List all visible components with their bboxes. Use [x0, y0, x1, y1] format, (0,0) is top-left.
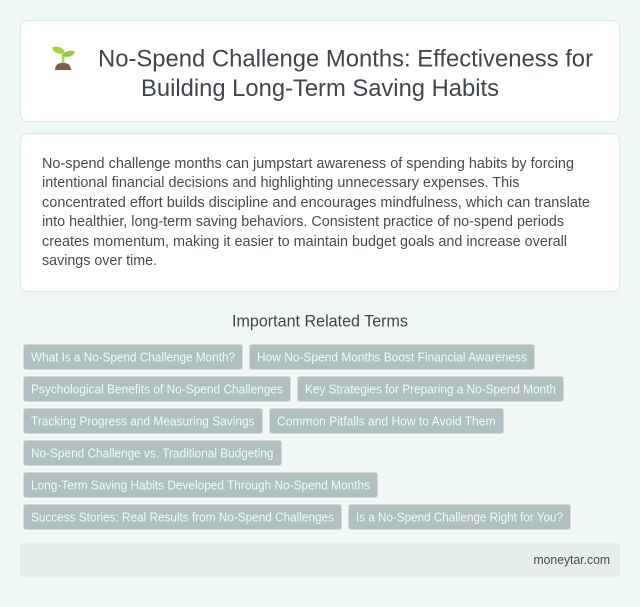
- tag: what is a no-spend challenge month: What Is a No-Spend Challenge Month?: [31, 350, 235, 364]
- tag: psychological benefits: Psychological Benefits of No-Spend Challenges: [31, 382, 283, 396]
- text block: summary paragraph: into healthier, long-term saving behaviors. Consistent practice of no-spend periods: [42, 214, 564, 230]
- title: [98, 46, 593, 102]
- tag: psychological benefits: [24, 376, 290, 402]
- tag: success stories: [24, 504, 342, 530]
- tag: no-spend vs budgeting: [24, 440, 282, 466]
- tag: common pitfalls: [270, 408, 504, 434]
- tag: tracking progress: [24, 408, 262, 434]
- tag: success stories: Success Stories: Real Results from No-Spend Challenges: [31, 510, 334, 524]
- title: No-Spend Challenge Months: Effectiveness for: [98, 46, 593, 72]
- tag: how no-spend months boost awareness: How No-Spend Months Boost Financial Awareness: [257, 350, 527, 364]
- panel: summary text card: [20, 134, 620, 292]
- tag: key strategies: Key Strategies for Preparing a No-Spend Month: [305, 382, 556, 396]
- tag: tracking progress: Tracking Progress and Measuring Savings: [31, 414, 254, 428]
- tag: key strategies: [298, 376, 564, 402]
- tag: how no-spend months boost awareness: [250, 344, 534, 370]
- text block: summary paragraph: concentrated effort builds discipline and encourages mindfulness, which can translate: [42, 195, 590, 211]
- footer source label: moneytar.com: [534, 553, 610, 567]
- tag: no-spend vs budgeting: No-Spend Challenge vs. Traditional Budgeting: [31, 446, 274, 460]
- panel: title card: [20, 20, 620, 122]
- panel: related term tags: [24, 344, 570, 530]
- tag: long-term saving habits: Long-Term Saving Habits Developed Through No-Spend Months: [31, 478, 370, 492]
- text block: summary paragraph: intentional financial decisions and highlighting unnecessary expenses. This: [42, 175, 520, 191]
- icon: seedling: [52, 47, 75, 70]
- text block: summary paragraph: savings over time.: [42, 253, 157, 269]
- tag: what is a no-spend challenge month: [24, 344, 242, 370]
- tag: long-term saving habits: [24, 472, 378, 498]
- text block: summary paragraph: creates momentum, making it easier to maintain budget goals and increase overall: [42, 234, 567, 250]
- tag: is it right for you: [348, 504, 570, 530]
- text block: summary paragraph: [42, 156, 590, 269]
- text block: summary paragraph: No-spend challenge months can jumpstart awareness of spending habits by forcing: [42, 156, 574, 172]
- title: Building Long-Term Saving Habits: [141, 75, 499, 102]
- tag: common pitfalls: Common Pitfalls and How to Avoid Them: [277, 414, 496, 428]
- heading: important related terms: Important Related Terms: [232, 312, 408, 330]
- tag: is it right for you: Is a No-Spend Challenge Right for You?: [356, 510, 563, 524]
- footer: [20, 543, 620, 577]
